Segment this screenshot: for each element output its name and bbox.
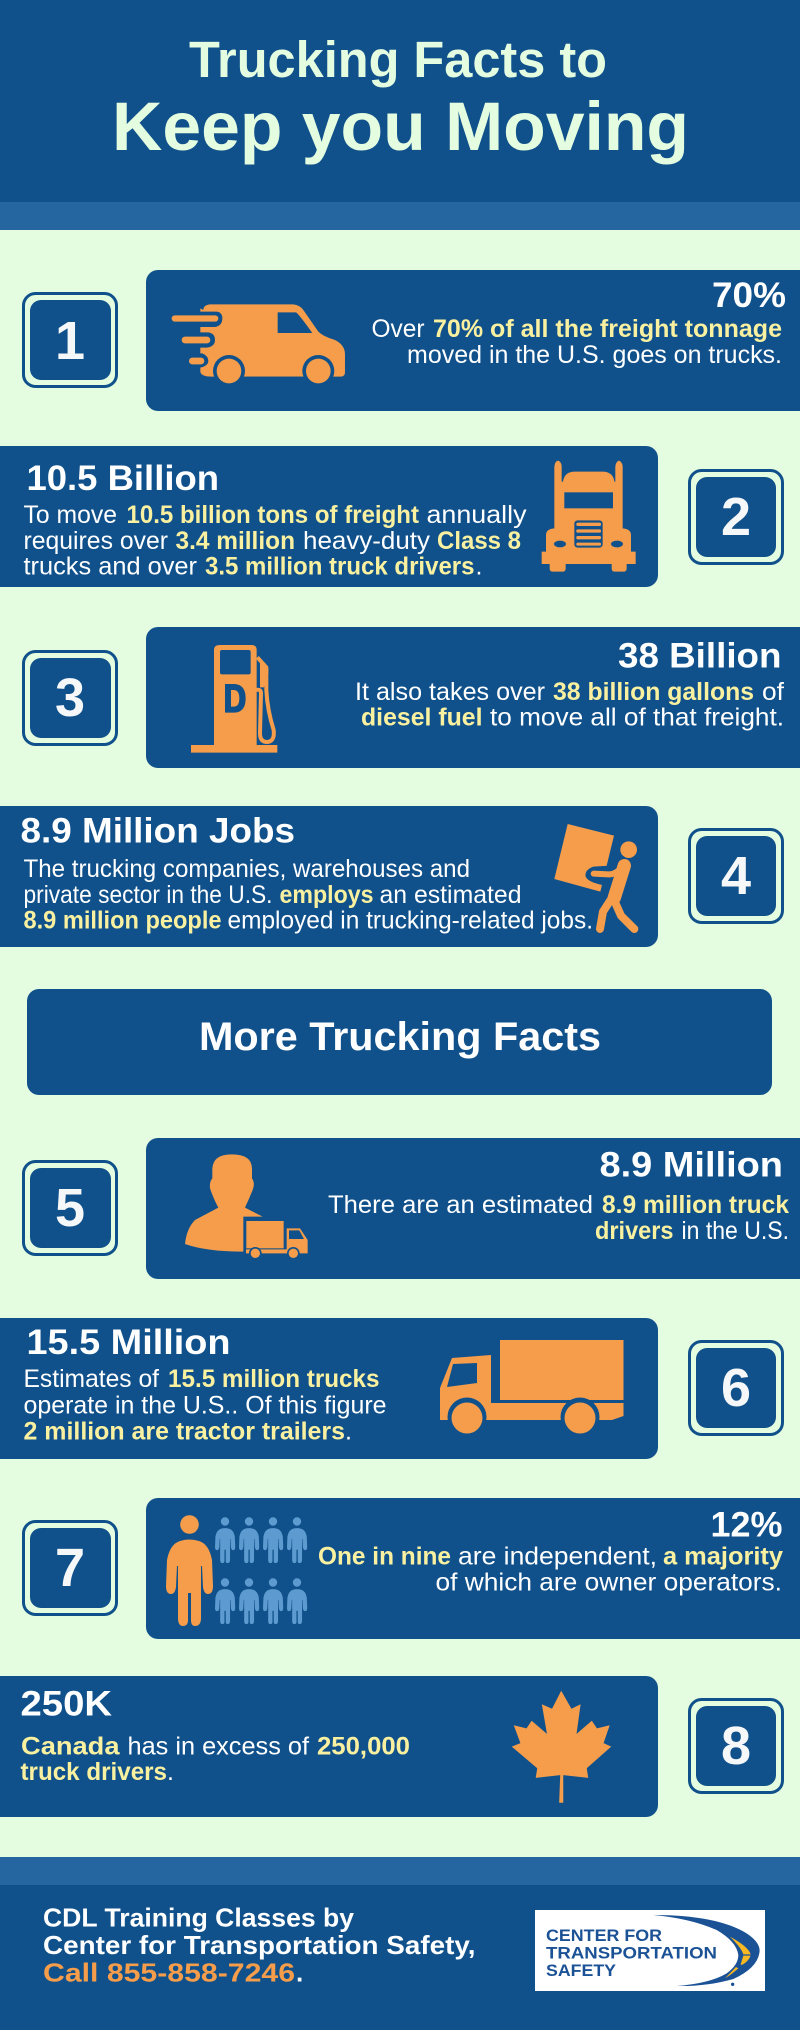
- description: .: [167, 1758, 174, 1786]
- description: 3.4 million: [176, 527, 295, 555]
- description: annually: [426, 501, 527, 529]
- description: [318, 1542, 783, 1596]
- badge 1: 1: [55, 311, 85, 371]
- badge 5: 5: [55, 1178, 85, 1238]
- panel: fact 1: [146, 270, 800, 411]
- panel: fact 7: [146, 1498, 800, 1639]
- header: [0, 0, 800, 230]
- panel: fact 4: [0, 806, 658, 947]
- logo road swoosh: [653, 1915, 760, 1986]
- description: 250,000: [317, 1732, 410, 1760]
- icon: box truck: [440, 1340, 630, 1440]
- footer call to action: .: [296, 1958, 303, 1988]
- badge 3: [24, 652, 116, 744]
- description: truck drivers: [20, 1758, 167, 1786]
- description: [24, 501, 527, 580]
- badge 1: [24, 294, 116, 386]
- badge 2: [690, 470, 782, 564]
- badge 2: 2: [721, 487, 751, 547]
- stat: 8.9 Million: 8.9 Million: [600, 1146, 783, 1184]
- badge 8: [690, 1700, 782, 1792]
- description: of which are owner operators.: [436, 1568, 782, 1596]
- description: diesel fuel: [361, 704, 482, 732]
- description: 3.5 million truck drivers: [205, 552, 474, 580]
- description: drivers: [595, 1217, 674, 1245]
- description: .: [345, 1418, 352, 1446]
- description: 70% of all the freight tonnage: [433, 315, 782, 343]
- stat: 10.5 Billion: 10.5 Billion: [26, 459, 219, 498]
- badge 8: 8: [721, 1716, 751, 1776]
- description: [20, 1732, 410, 1786]
- badge 4: [690, 830, 782, 922]
- description: [24, 1365, 386, 1446]
- description: Canada: [21, 1732, 121, 1760]
- description: 38 billion gallons: [553, 678, 754, 706]
- icon: driver and truck: [185, 1154, 308, 1260]
- icon: fuel pump: [191, 645, 277, 753]
- description: [328, 1191, 789, 1245]
- logo: Center for Transportation Safety: TRANSPORTATION: [546, 1944, 717, 1962]
- icon: worker carrying box: [554, 824, 637, 929]
- badge 6: 6: [721, 1358, 751, 1418]
- footer: [0, 1857, 800, 2030]
- description: [355, 678, 784, 732]
- description: Estimates of: [24, 1365, 159, 1393]
- description: trucks and over: [24, 552, 197, 580]
- icon: semi truck front: [542, 461, 636, 572]
- description: One in nine: [318, 1542, 451, 1570]
- description: private sector in the U.S.: [24, 881, 272, 909]
- stat: 38 Billion: 38 Billion: [618, 636, 782, 676]
- description: employs: [280, 881, 374, 909]
- description: has in excess of: [128, 1732, 309, 1760]
- logo: Center for Transportation Safety: SAFETY: [546, 1962, 616, 1980]
- description: Over: [372, 315, 424, 343]
- description: [24, 855, 593, 934]
- footer call to action: Center for Transportation Safety,: [43, 1930, 476, 1960]
- panel: fact 8: [0, 1676, 658, 1817]
- description: 10.5 billion tons of freight: [126, 501, 420, 529]
- description: To move: [24, 501, 117, 529]
- description: There are an estimated: [328, 1191, 593, 1219]
- description: employed in trucking-related jobs.: [228, 906, 593, 934]
- footer call to action: Call 855-858-7246: [43, 1958, 295, 1988]
- title: Trucking Facts to: [189, 31, 607, 88]
- description: of: [762, 678, 784, 706]
- description: heavy-duty: [303, 527, 431, 555]
- footer call to action: [43, 1902, 476, 1988]
- stat: 250K: 250K: [20, 1684, 112, 1724]
- title: Keep you Moving: [112, 88, 689, 165]
- icon: maple leaf: [512, 1691, 611, 1803]
- description: 8.9 million truck: [602, 1191, 789, 1219]
- logo: Center for Transportation Safety: CENTER FOR: [546, 1927, 662, 1945]
- panel: fact 5: [146, 1138, 800, 1279]
- icon: one in nine people: [166, 1515, 307, 1626]
- panel: fact 2: [0, 446, 658, 587]
- badge 7: [24, 1522, 116, 1614]
- description: requires over: [24, 527, 168, 555]
- description: The trucking companies, warehouses and: [24, 855, 470, 883]
- stat: 12%: 12%: [710, 1506, 782, 1544]
- description: .: [476, 552, 482, 580]
- section heading: More Trucking Facts: More Trucking Facts: [199, 1015, 601, 1059]
- description: in the U.S.: [682, 1217, 789, 1245]
- description: a majority: [663, 1542, 783, 1570]
- panel: fact 6: [0, 1318, 658, 1459]
- description: [372, 315, 782, 369]
- section heading: More Trucking Facts: [27, 989, 772, 1095]
- description: 8.9 million people: [24, 906, 222, 934]
- description: It also takes over: [355, 678, 545, 706]
- badge 3: 3: [55, 668, 85, 728]
- description: moved in the U.S. goes on trucks.: [407, 341, 782, 369]
- badge 4: 4: [721, 846, 751, 906]
- badge 5: [24, 1162, 116, 1254]
- description: an estimated: [380, 881, 522, 909]
- stat: 70%: 70%: [712, 276, 786, 315]
- stat: 15.5 Million: 15.5 Million: [26, 1323, 230, 1362]
- logo: Center for Transportation Safety: [535, 1910, 765, 1991]
- badge 6: [690, 1342, 782, 1434]
- footer call to action: CDL Training Classes by: [43, 1902, 355, 1932]
- title: [112, 31, 689, 165]
- description: Class 8: [437, 527, 521, 555]
- description: to move all of that freight.: [490, 704, 784, 732]
- description: are independent,: [458, 1542, 657, 1570]
- icon: van: [172, 304, 345, 387]
- stat: 8.9 Million Jobs: 8.9 Million Jobs: [20, 812, 295, 850]
- description: 15.5 million trucks: [168, 1365, 380, 1393]
- description: 2 million are tractor trailers: [24, 1418, 345, 1446]
- badge 7: 7: [55, 1538, 85, 1598]
- panel: fact 3: [146, 627, 800, 768]
- description: operate in the U.S.. Of this figure: [24, 1392, 386, 1420]
